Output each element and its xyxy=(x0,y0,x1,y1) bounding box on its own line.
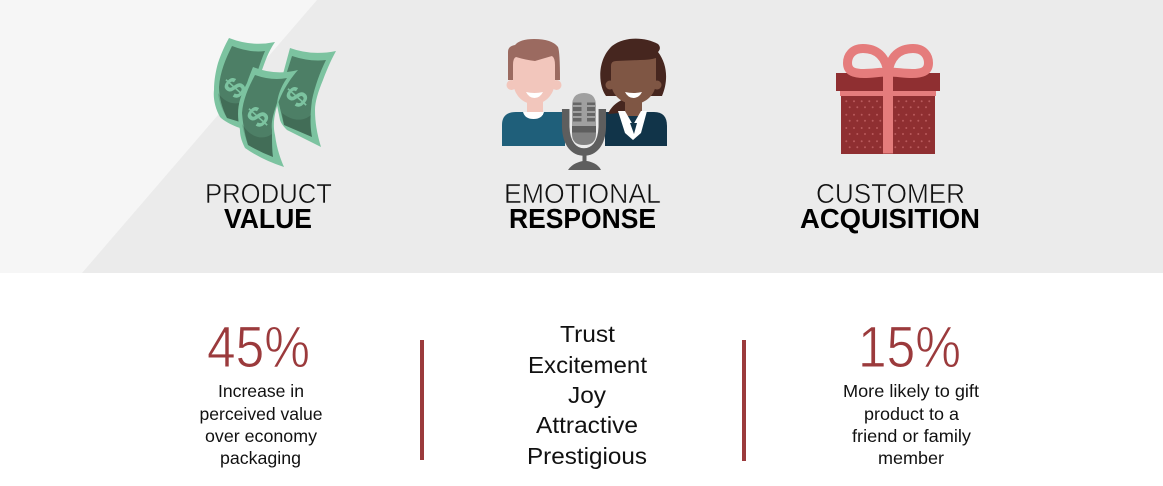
divider right xyxy=(742,340,746,461)
man xyxy=(502,39,565,146)
text: increase in perceived value: Increase in xyxy=(218,381,304,401)
stat: 45%: 45% xyxy=(207,315,310,380)
divider left xyxy=(420,340,424,460)
heading: customer acquisition xyxy=(800,178,980,234)
header background band xyxy=(0,0,1163,273)
text: increase in perceived value: over economy xyxy=(205,426,317,446)
text: more likely to gift: friend or family xyxy=(852,426,971,446)
list: emotional responses xyxy=(527,321,648,469)
heading: emotional response: RESPONSE xyxy=(509,203,656,234)
heading: product value: PRODUCT xyxy=(205,178,332,209)
icon: gift box xyxy=(836,48,940,154)
microphone xyxy=(566,93,602,170)
icon: money bills: $ xyxy=(218,71,253,106)
list: emotional responses: Attractive xyxy=(536,412,638,438)
heading: customer acquisition: ACQUISITION xyxy=(800,203,980,234)
heading: product value: VALUE xyxy=(224,203,312,234)
text: more likely to gift: product to a xyxy=(864,404,959,424)
icon: money bills xyxy=(214,38,336,167)
text: increase in perceived value: packaging xyxy=(220,448,301,468)
heading: product value xyxy=(205,178,332,234)
list: emotional responses: Excitement xyxy=(528,352,648,378)
heading: customer acquisition: CUSTOMER xyxy=(816,178,965,209)
text: more likely to gift: member xyxy=(878,448,944,468)
list: emotional responses: Prestigious xyxy=(527,443,647,469)
icon: man and woman with microphone xyxy=(502,39,667,170)
icon: money bills: $ xyxy=(241,100,276,135)
list: emotional responses: Joy xyxy=(568,382,607,408)
stat: 15%: 15% xyxy=(858,315,961,380)
heading: emotional response xyxy=(504,178,661,234)
woman xyxy=(600,39,667,146)
list: emotional responses: Trust xyxy=(560,321,616,347)
icon: money bills: $ xyxy=(280,80,315,115)
heading: emotional response: EMOTIONAL xyxy=(504,178,661,209)
text: more likely to gift: More likely to gift xyxy=(843,381,979,401)
text: more likely to gift xyxy=(843,381,979,468)
text: increase in perceived value: perceived value xyxy=(200,404,322,424)
text: increase in perceived value xyxy=(200,381,322,468)
